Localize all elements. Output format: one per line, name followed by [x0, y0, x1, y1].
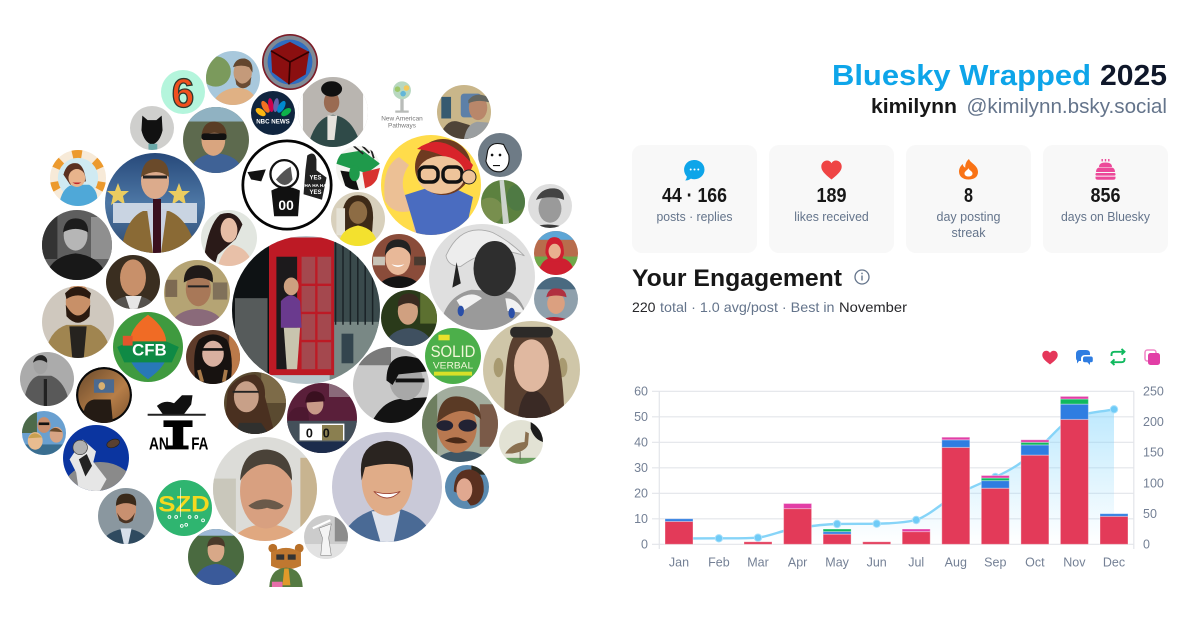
bar: Mar: [744, 542, 772, 544]
avatar: woman at red telephone box: [232, 236, 380, 384]
engagement summary text: [632, 299, 907, 315]
avatar: football mascot logo: YES: [310, 175, 322, 181]
panel: day posting streak: 8: [964, 185, 973, 207]
avatar: The Solid Verbal logo: [425, 328, 481, 384]
chart: monthly engagement: [634, 384, 1164, 570]
icon: legend quotes: [1145, 350, 1160, 365]
avatar: bald man smiling: [106, 255, 160, 309]
avatar: dim tablet photo: [76, 367, 132, 423]
avatar: man in blue shirt outdoors: [188, 529, 244, 585]
avatar: football mascot logo: YES: [310, 190, 322, 196]
icon: heart: [821, 160, 842, 180]
avatar: New American Pathways logo: New American: [381, 116, 423, 123]
bar: Dec: [1100, 514, 1128, 544]
avatar: man with moustache: [213, 437, 317, 541]
avatar: man with glasses and plaid shirt: [164, 260, 230, 326]
avatar: The Solid Verbal logo: SOLID: [431, 343, 475, 361]
left axis labels: 20: [634, 486, 648, 500]
month labels: Jan: [669, 556, 689, 570]
month labels: Feb: [708, 556, 730, 570]
avatar: young man against foliage: [381, 290, 437, 346]
left axis labels: 10: [634, 512, 648, 526]
avatar: man in red cap: [534, 277, 578, 321]
left axis labels: 0: [641, 538, 648, 552]
avatar: man in grey cap: [528, 184, 572, 228]
avatar: smiling man in blue blazer: [332, 432, 442, 542]
avatar: ANTFA logo: [148, 395, 208, 453]
avatar: football mascot logo: HA HA HA: [304, 183, 327, 188]
avatar: football mascot logo: [241, 140, 333, 230]
month labels: Aug: [945, 556, 967, 570]
engagement summary text: November: [839, 299, 907, 315]
bar: Sep: [981, 476, 1009, 544]
avatar: astronaut and football: [63, 425, 129, 491]
avatar: man with long hair and glasses: [224, 372, 286, 434]
avatar: bearded man in tan jacket: [42, 286, 114, 358]
avatar: CFB logo: CFB: [132, 340, 167, 359]
panel: day posting streak: [906, 145, 1031, 253]
panel: posts and replies: [632, 145, 757, 253]
avatar: wading bird picture: [499, 420, 543, 464]
avatar: KRD cube logo: [262, 34, 318, 90]
avatar: black cat: [130, 106, 174, 150]
avatar: NBC News logo: NBC NEWS: [256, 119, 290, 126]
avatar: Virginia Tech fan with scoreboard: 0: [306, 427, 313, 441]
avatar: number six badge: [161, 70, 205, 114]
avatar: bearded man outdoors: [206, 51, 260, 105]
avatar: red haired woman: [445, 465, 489, 509]
left axis labels: 50: [634, 410, 648, 424]
avatar: cartoon bear: [268, 544, 304, 587]
bar: Oct: [1021, 440, 1049, 544]
avatar: person in yellow jacket: [331, 192, 385, 246]
right axis labels: 0: [1143, 538, 1150, 552]
right axis labels: 150: [1143, 446, 1164, 460]
month labels: [669, 556, 1125, 570]
bar: Jul: [902, 529, 930, 544]
stacked bars: [665, 396, 1128, 544]
avatar: woman with sunglasses on head: [483, 321, 580, 418]
month labels: Sep: [984, 556, 1006, 570]
panel: day posting streak: streak: [952, 225, 986, 240]
avatar: man in sunglasses: [183, 107, 249, 173]
right axis labels: 250: [1143, 384, 1164, 398]
user name and handle: @kimilynn.bsky.social: [966, 96, 1167, 118]
avatar: vintage newsman photo: [20, 352, 74, 406]
avatar: family selfie: [22, 411, 66, 455]
left axis labels: 40: [634, 436, 648, 450]
engagement summary text: 220: [632, 299, 656, 315]
right axis labels: 200: [1143, 415, 1164, 429]
month labels: Nov: [1063, 556, 1086, 570]
left axis labels: 30: [634, 461, 648, 475]
bar: Aug: [942, 437, 970, 544]
avatar: bison in cowboy hat: [429, 224, 535, 330]
avatar: cartoon woman in hoodie: [50, 150, 106, 206]
avatar: CFB logo: [113, 312, 183, 382]
avatar: football mascot logo: 00: [278, 198, 294, 213]
avatar: New American Pathways logo: [381, 81, 423, 129]
avatar: man on a train: [437, 85, 491, 139]
heading: Your Engagement: Your Engagement: [632, 265, 842, 292]
user name and handle: [871, 96, 1167, 118]
panel: posts and replies: 44 · 166: [662, 185, 727, 207]
chart legend: [1042, 349, 1160, 365]
avatar: sketched face: [478, 133, 522, 177]
avatar: fan in red hood: [534, 231, 578, 275]
avatar: black and white man with glasses: [353, 347, 429, 423]
icon: legend replies: [1076, 350, 1093, 365]
month labels: Jun: [867, 556, 887, 570]
chart grid: [652, 391, 1134, 549]
avatar: number six badge: 6: [172, 70, 194, 116]
title: Bluesky Wrapped: [832, 60, 1091, 92]
left axis labels: 60: [634, 384, 648, 398]
month labels: Oct: [1025, 556, 1045, 570]
avatar: SZD logo: SZD: [158, 491, 210, 516]
avatar: New American Pathways logo: Pathways: [388, 122, 416, 129]
bar: Jan: [665, 519, 693, 544]
month labels: Apr: [788, 556, 807, 570]
panel: day posting streak: day posting: [936, 209, 1000, 224]
avatar: Virginia Tech fan with scoreboard: [287, 383, 357, 453]
avatar: woman in green jacket: [298, 77, 368, 147]
avatar: smiling man before brick wall: [372, 234, 426, 288]
title: 2025: [1100, 60, 1167, 92]
bar: Jun: [863, 542, 891, 544]
icon: legend heart: [1042, 351, 1058, 364]
panel: days on Bluesky: 856: [1090, 185, 1120, 207]
bar: Apr: [784, 504, 812, 544]
avatar: NBC News logo: [251, 91, 295, 135]
avatar: green bug logo: [336, 146, 380, 190]
panel: avatar bubble cluster: [20, 34, 580, 587]
panel: likes received: likes received: [794, 209, 869, 224]
month labels: Jul: [908, 556, 924, 570]
bar: May: [823, 529, 851, 544]
panel: days on Bluesky: days on Bluesky: [1061, 209, 1150, 224]
avatar: man in brown blazer with stars: [105, 153, 205, 253]
icon: speech bubble: [684, 160, 705, 180]
engagement summary text: total · 1.0 avg/post · Best in: [660, 299, 834, 315]
avatar: woman with glasses and braids: [186, 330, 240, 384]
left axis labels: [634, 384, 648, 552]
panel: likes received: [769, 145, 894, 253]
icon: birthday cake: [1096, 159, 1116, 180]
panel: posts and replies: posts · replies: [656, 209, 733, 224]
avatar: man in blue suit: [98, 488, 154, 544]
avatar: Virginia Tech fan with scoreboard: 0: [323, 427, 330, 441]
bar: Nov: [1060, 396, 1088, 544]
right axis labels: 50: [1143, 507, 1157, 521]
avatar: cartoon Rosie the Riveter: [381, 135, 481, 235]
avatar: vintage cricket photo: [304, 515, 348, 559]
icon: info: [855, 270, 869, 284]
month labels: May: [825, 556, 850, 570]
month labels: Dec: [1103, 556, 1125, 570]
icon: flame: [959, 159, 978, 180]
avatar: black and white portrait: [42, 210, 112, 280]
panel: likes received: 189: [816, 185, 846, 207]
month labels: Mar: [747, 556, 769, 570]
avatar: man in aviator sunglasses: [422, 386, 498, 462]
right axis labels: [1143, 384, 1164, 552]
avatar: ANTFA logo: AN: [149, 433, 169, 453]
avatar: The Solid Verbal logo: VERBAL: [433, 360, 473, 371]
panel: days on Bluesky: [1043, 145, 1168, 253]
right axis labels: 100: [1143, 476, 1164, 490]
avatar: dark haired woman: [201, 210, 257, 266]
cumulative area and line: [679, 406, 1118, 544]
avatar: SZD logo: [156, 480, 212, 536]
avatar: waterfall photo: [481, 180, 525, 224]
user name and handle: kimilynn: [871, 96, 957, 118]
icon: legend reposts: [1112, 349, 1124, 365]
